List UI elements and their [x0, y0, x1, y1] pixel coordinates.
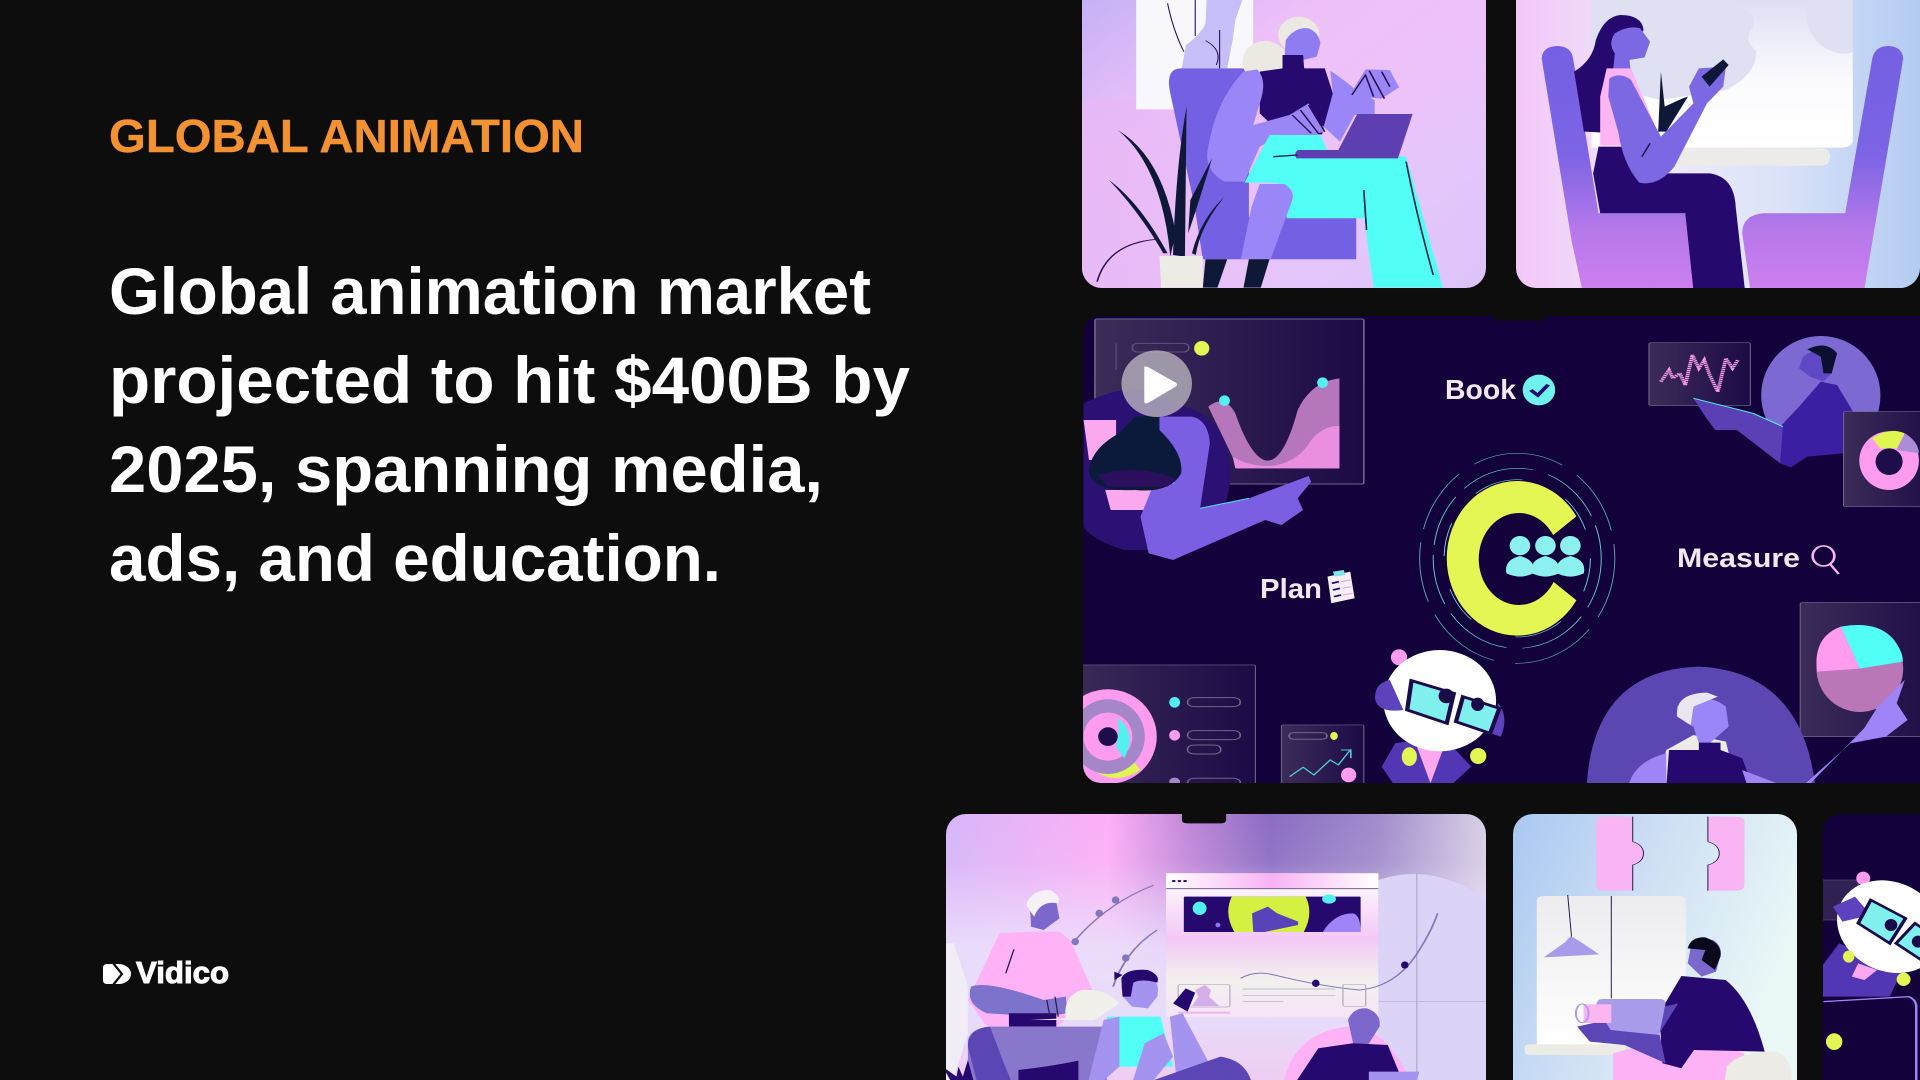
browser window — [1166, 873, 1378, 1017]
pink top — [1600, 68, 1661, 146]
robot shoulders — [1822, 943, 1902, 997]
icon: clipboard — [1327, 570, 1355, 603]
area chart — [1208, 378, 1339, 468]
trousers — [1245, 135, 1443, 288]
pot — [1159, 256, 1203, 288]
notch — [1182, 813, 1226, 823]
browser image — [1184, 894, 1361, 932]
arms — [1207, 69, 1325, 182]
background arch — [1378, 874, 1489, 1080]
main statement text: 2025, spanning media, — [109, 432, 823, 506]
panel: man with mug illustration — [1513, 814, 1797, 1080]
main statement text: ads, and education. — [109, 521, 721, 595]
pie card — [1800, 603, 1920, 737]
orbit rings — [1420, 453, 1615, 663]
cat — [1182, 0, 1242, 68]
team icon — [1506, 536, 1584, 577]
neck and torso — [1260, 55, 1333, 134]
bottom left card — [1083, 664, 1256, 783]
icon: magnifier — [1813, 546, 1839, 574]
main statement text — [109, 254, 910, 595]
sill — [1672, 148, 1830, 166]
hand right — [1351, 69, 1399, 99]
panel: robot cropped illustration — [1820, 814, 1920, 1080]
plant — [943, 1060, 974, 1080]
panel: man with laptop illustration — [1082, 0, 1486, 288]
man — [1688, 939, 1721, 977]
panel: team with browser illustration — [930, 813, 1489, 1080]
legs — [1203, 259, 1269, 288]
heading: global animation: GLOBAL ANIMATION — [109, 110, 584, 162]
plant — [1109, 107, 1224, 257]
man in circle — [1761, 336, 1880, 426]
rear pillow — [1242, 41, 1285, 73]
presenter woman — [1084, 389, 1230, 550]
hair — [1574, 15, 1644, 133]
pillow — [1724, 1052, 1792, 1080]
puzzle pieces — [1596, 817, 1745, 891]
knee — [1241, 184, 1293, 259]
card below robot — [1823, 997, 1916, 1080]
panel: dark marketing funnel illustration — [1059, 316, 1920, 792]
sofa — [968, 1027, 1107, 1080]
main statement text: Global animation market — [109, 254, 871, 328]
label: book: Book — [1445, 374, 1516, 405]
head — [1278, 16, 1320, 48]
clouds — [1592, 26, 1756, 100]
logo: Vidico: Vidico — [136, 955, 229, 990]
window — [1136, 0, 1253, 109]
center C logo — [1420, 453, 1615, 663]
panel: woman on train illustration — [1516, 0, 1920, 290]
laptop — [1295, 114, 1413, 158]
phone — [1702, 59, 1729, 87]
right seat — [1742, 46, 1903, 290]
notch — [1494, 316, 1546, 321]
seated woman with glasses — [1284, 1008, 1419, 1080]
card behind robot — [1820, 880, 1858, 920]
main statement text: projected to hit $400B by — [109, 343, 910, 417]
trousers — [1593, 147, 1745, 290]
chart card — [1095, 319, 1364, 484]
donut card right — [1844, 412, 1920, 507]
face — [1611, 27, 1650, 69]
woman dome — [1587, 667, 1815, 787]
window — [1537, 896, 1686, 1045]
label: measure: Measure — [1677, 543, 1800, 573]
label: plan: Plan — [1260, 573, 1322, 604]
small line chart card — [1281, 725, 1364, 788]
window — [1592, 0, 1853, 148]
lamp — [1568, 895, 1572, 937]
arm — [1608, 67, 1726, 183]
icon: book check — [1523, 375, 1555, 405]
chart card top right — [1649, 343, 1750, 406]
man in pink — [930, 890, 1119, 1080]
jacket on lap — [1658, 72, 1688, 132]
left seat — [1542, 46, 1703, 290]
robot — [1375, 649, 1504, 787]
mug — [1596, 999, 1666, 1035]
play button — [1121, 350, 1192, 417]
curves — [1074, 885, 1438, 990]
page details — [1178, 984, 1366, 1007]
seated boy — [1088, 970, 1252, 1080]
chair — [1169, 68, 1356, 259]
